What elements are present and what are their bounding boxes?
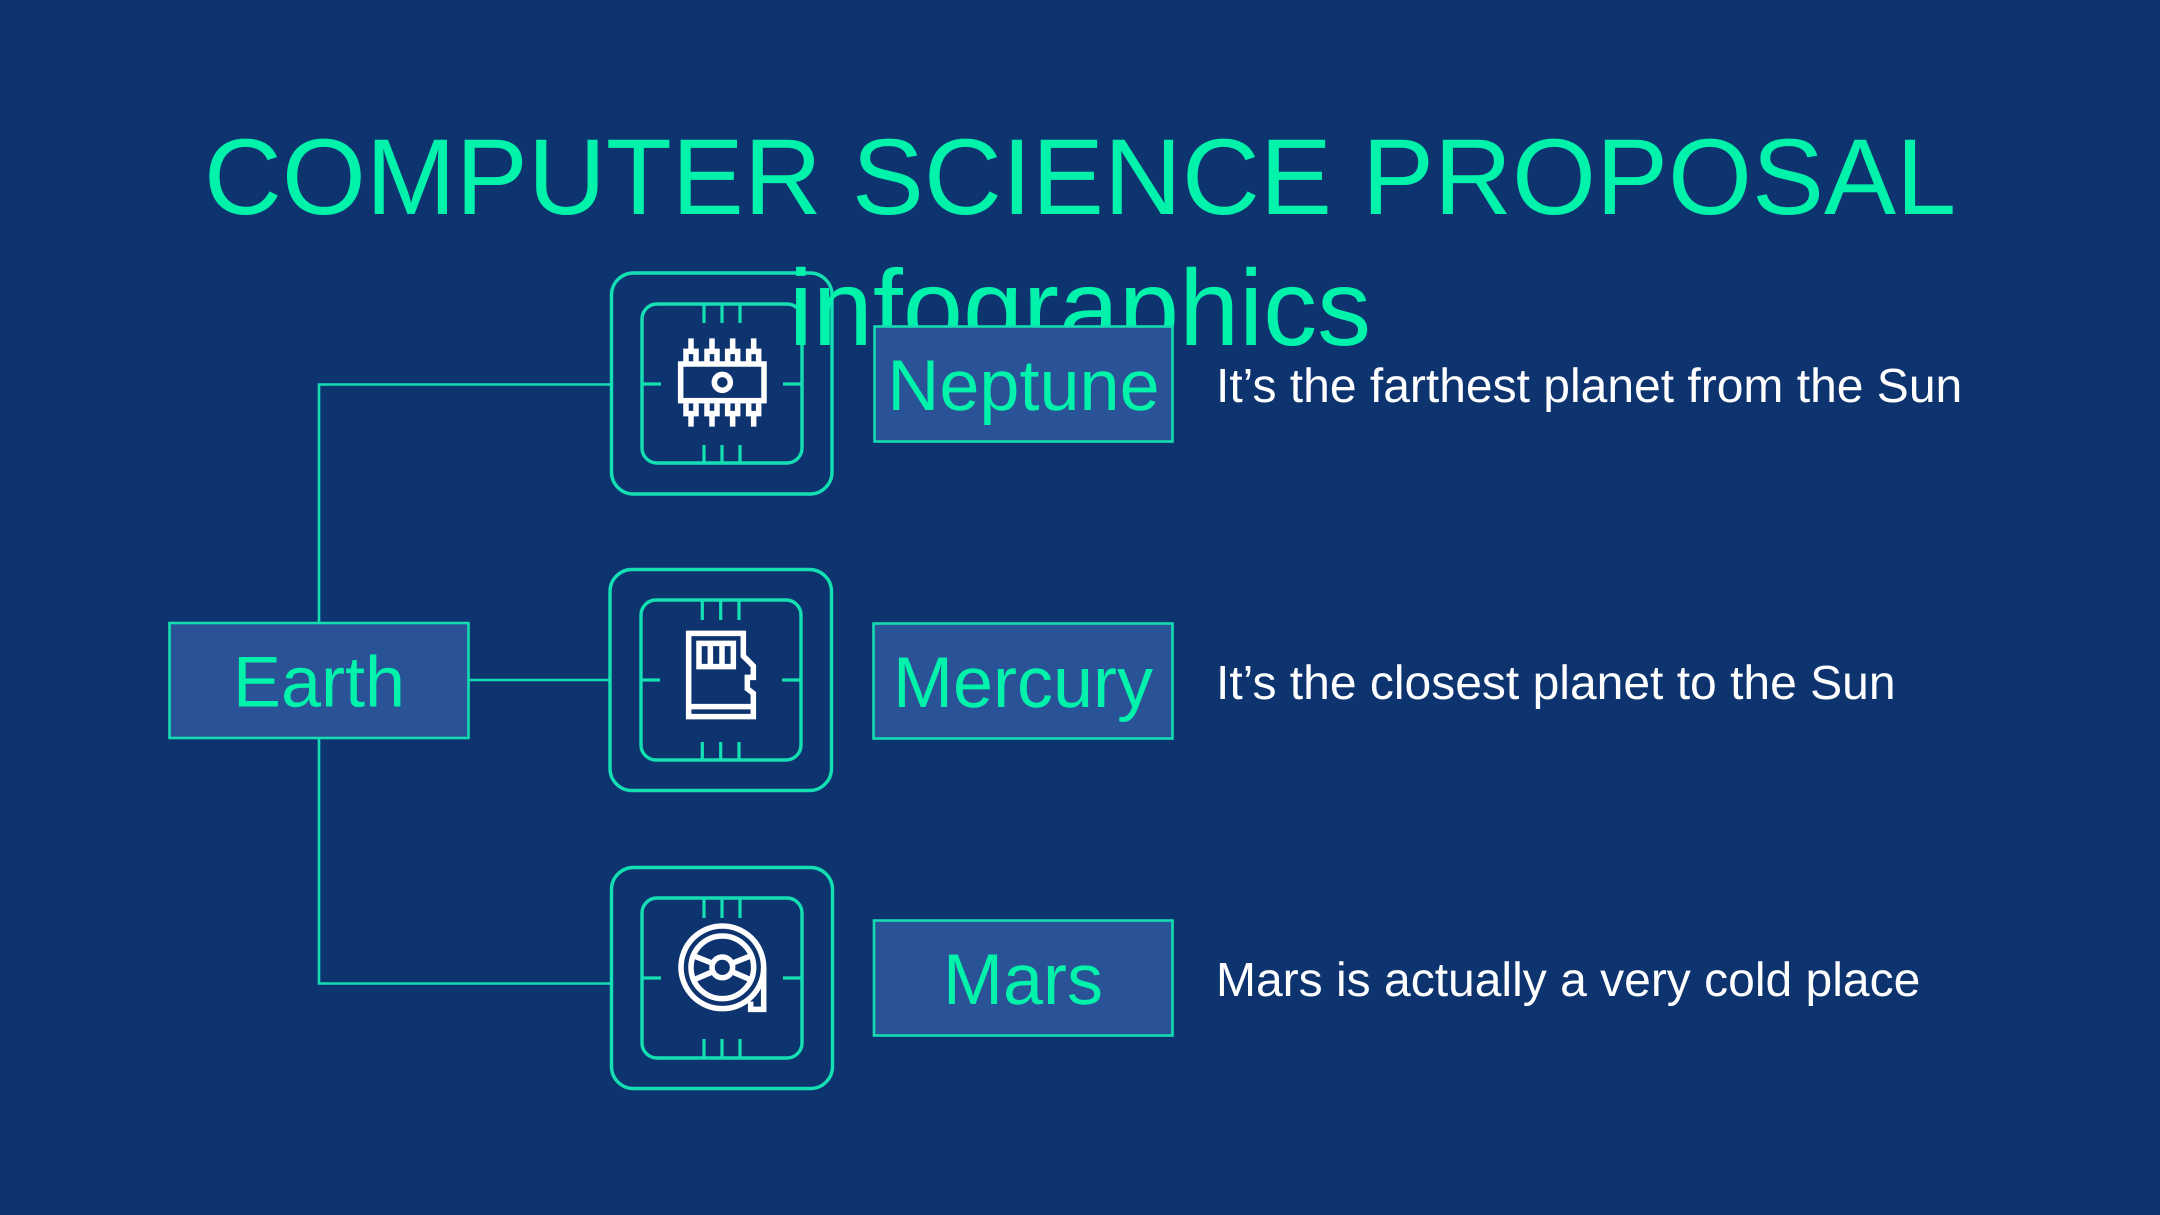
title: infographics — [789, 247, 1371, 368]
node: Mars: Mars — [943, 940, 1103, 1020]
node: Mars — [874, 920, 1172, 1036]
panel: Mars chip icon — [612, 868, 832, 1088]
title — [204, 116, 1956, 368]
icon: memory chip — [681, 338, 764, 427]
description: Neptune: It’s the farthest planet from the Sun — [1216, 360, 1962, 413]
panel: Neptune chip icon — [612, 273, 832, 494]
node: Earth: Earth — [233, 642, 405, 722]
node: Mercury: Mercury — [893, 643, 1153, 723]
title: COMPUTER SCIENCE PROPOSAL — [204, 116, 1956, 237]
icon: micro SD card — [689, 633, 753, 717]
icon: hard disk reel — [681, 926, 764, 1009]
node: Neptune — [874, 326, 1172, 442]
panel: Mercury chip icon — [610, 570, 832, 790]
description: Mercury: It’s the closest planet to the Sun — [1216, 657, 1896, 710]
description: Mars: Mars is actually a very cold place — [1216, 954, 1920, 1007]
node: Neptune: Neptune — [887, 346, 1160, 426]
node: Earth — [170, 623, 468, 738]
node: Mercury — [874, 624, 1172, 738]
connector lines from Earth to the three chips — [319, 384, 612, 984]
